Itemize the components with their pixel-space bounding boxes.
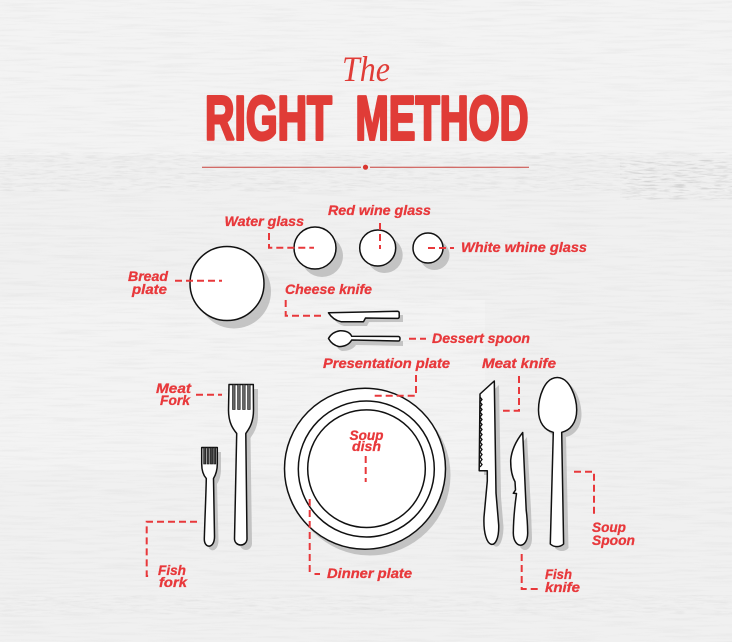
title words: Right Method: [205, 84, 528, 154]
label: soup spoon: [574, 472, 635, 548]
dessert spoon: [328, 331, 403, 351]
fork tines: [204, 448, 216, 464]
label: bread plate: plate: [131, 281, 167, 297]
fish fork: [202, 448, 221, 550]
meat fork: [228, 384, 258, 550]
dinner plates: [284, 388, 450, 556]
label: soup dish: Soup: [350, 427, 384, 443]
label: fish knife: knife: [545, 579, 580, 595]
label: dinner plate: Dinner plate: [327, 565, 412, 581]
label: red wine glass: [328, 202, 431, 249]
label: fish fork: Fish: [158, 562, 186, 578]
label: cheese knife: Cheese knife: [285, 281, 372, 297]
red wine glass: [360, 230, 403, 273]
title words: Right Method: RIGHT: [205, 84, 332, 154]
presentation plate: [284, 388, 446, 549]
soup spoon: [538, 378, 582, 551]
label: meat fork: [156, 380, 222, 408]
label: soup spoon: Soup: [592, 519, 626, 535]
dinner plate: [298, 401, 434, 537]
fish knife: [511, 432, 532, 550]
bread plate: [190, 246, 271, 328]
soup dish: [308, 410, 425, 528]
title words: Right Method: METHOD: [356, 84, 528, 154]
label: fish fork: [147, 522, 197, 590]
label: meat fork: Meat: [156, 380, 192, 396]
label: fish knife: [522, 554, 580, 595]
label: presentation plate: Presentation plate: [323, 355, 450, 371]
label: dessert spoon: Dessert spoon: [432, 330, 530, 346]
label: soup spoon: Spoon: [592, 532, 635, 548]
label: meat knife: [482, 355, 556, 411]
label: meat knife: Meat knife: [482, 355, 556, 371]
title word: The: The: [342, 49, 390, 89]
label: bread plate: [128, 268, 222, 297]
title: [205, 49, 528, 154]
plate shadow: [290, 394, 450, 556]
label: fish fork: fork: [159, 574, 188, 590]
label: dinner plate: [310, 499, 412, 581]
title divider: [202, 165, 529, 170]
fork tines: [232, 384, 250, 410]
cheese knife: [328, 311, 403, 326]
label: bread plate: Bread: [128, 268, 168, 284]
label: meat fork: Fork: [160, 392, 191, 408]
label: soup dish: [350, 427, 384, 482]
water glass: [294, 227, 343, 277]
label: white wine glass: White whine glass: [461, 239, 587, 255]
meat knife: [479, 381, 504, 547]
label: soup dish: dish: [352, 438, 381, 454]
label: presentation plate: [323, 355, 450, 396]
white wine glass: [413, 233, 450, 270]
label: fish knife: Fish: [545, 566, 572, 582]
label: water glass: Water glass: [224, 213, 304, 229]
label: red wine glass: Red wine glass: [328, 202, 431, 218]
serrated edge: [480, 397, 482, 467]
label: cheese knife: [285, 281, 372, 316]
label: water glass: [224, 213, 314, 248]
